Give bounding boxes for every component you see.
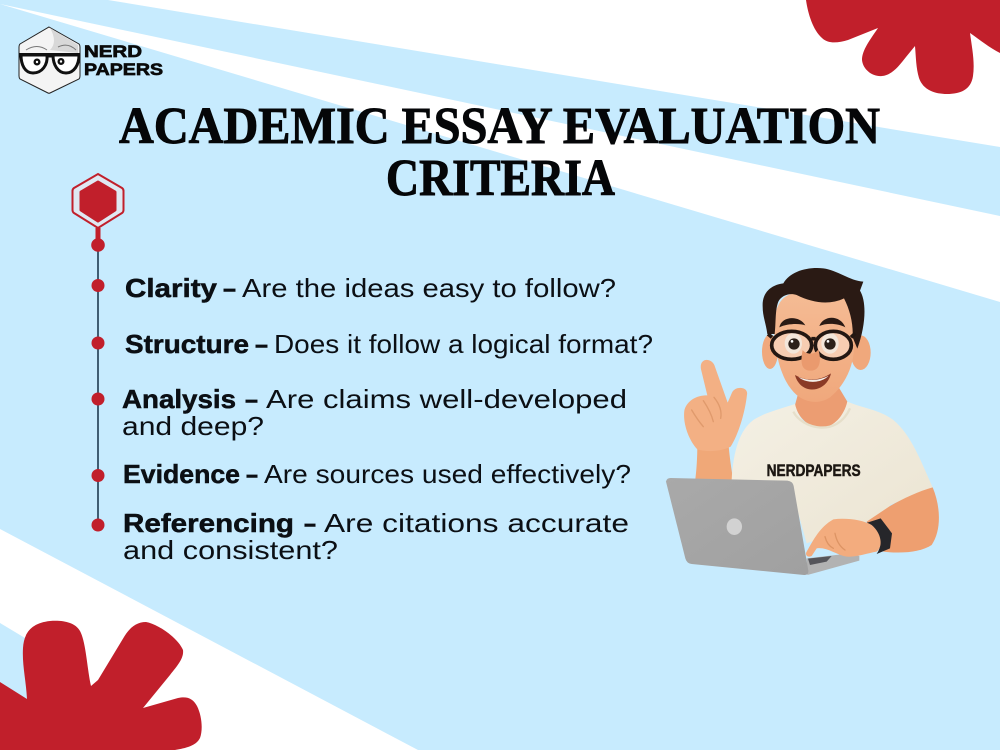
head <box>762 268 871 402</box>
decorative red blob: top right <box>806 0 1000 94</box>
criterion: referencing: – <box>304 508 316 538</box>
illustration: student with laptop <box>666 268 939 575</box>
criterion: analysis: and deep? <box>122 411 264 441</box>
criterion: referencing: Referencing <box>123 508 294 538</box>
criterion: evidence: Are sources used effectively? <box>264 459 631 489</box>
eyebrows <box>779 318 845 327</box>
timeline dots <box>92 279 104 532</box>
shirt wordmark: NERDPAPERS <box>767 461 861 480</box>
criterion: evidence: – <box>246 459 258 489</box>
typing hand <box>806 519 881 557</box>
criterion: structure <box>125 329 653 359</box>
criterion: evidence <box>123 459 631 489</box>
criterion: referencing <box>123 508 629 565</box>
criterion: analysis: Analysis <box>122 384 236 414</box>
face <box>774 293 854 402</box>
logo <box>19 27 163 93</box>
criterion: structure: Structure <box>125 329 249 359</box>
criterion: referencing: and consistent? <box>123 535 338 565</box>
timeline <box>72 174 124 532</box>
mouth <box>795 373 831 390</box>
criterion: structure: Does it follow a logical format? <box>274 329 653 359</box>
eyes <box>785 333 839 354</box>
right arm and watch <box>865 487 939 554</box>
lenses <box>772 331 812 359</box>
shirt <box>732 402 933 543</box>
neck <box>795 387 847 428</box>
criterion: analysis <box>122 384 627 441</box>
criterion: clarity: – <box>223 273 236 303</box>
criterion: evidence: Evidence <box>123 459 240 489</box>
logo wordmark <box>84 42 163 79</box>
raised arm and hand <box>684 360 747 482</box>
logo wordmark: NERD <box>84 42 142 61</box>
title: CRITERIA <box>386 150 615 207</box>
criterion: clarity <box>125 273 616 303</box>
nose <box>802 349 820 371</box>
criterion: clarity: Are the ideas easy to follow? <box>242 273 616 303</box>
logo wordmark: PAPERS <box>84 60 163 79</box>
logo hexagon face <box>19 27 80 93</box>
criterion: clarity: Clarity <box>125 273 218 303</box>
ears <box>762 334 778 369</box>
criterion: structure: – <box>255 329 268 359</box>
title: ACADEMIC ESSAY EVALUATION <box>119 98 880 155</box>
glasses <box>768 331 855 359</box>
decorative red blob: bottom left <box>0 621 202 750</box>
laptop <box>666 478 859 575</box>
title <box>119 98 880 207</box>
hair <box>763 268 864 349</box>
criterion: analysis: – <box>245 384 258 414</box>
icon: hexagon marker <box>72 174 124 252</box>
criterion: referencing: Are citations accurate <box>324 508 629 538</box>
criterion: analysis: Are claims well-developed <box>266 384 627 414</box>
